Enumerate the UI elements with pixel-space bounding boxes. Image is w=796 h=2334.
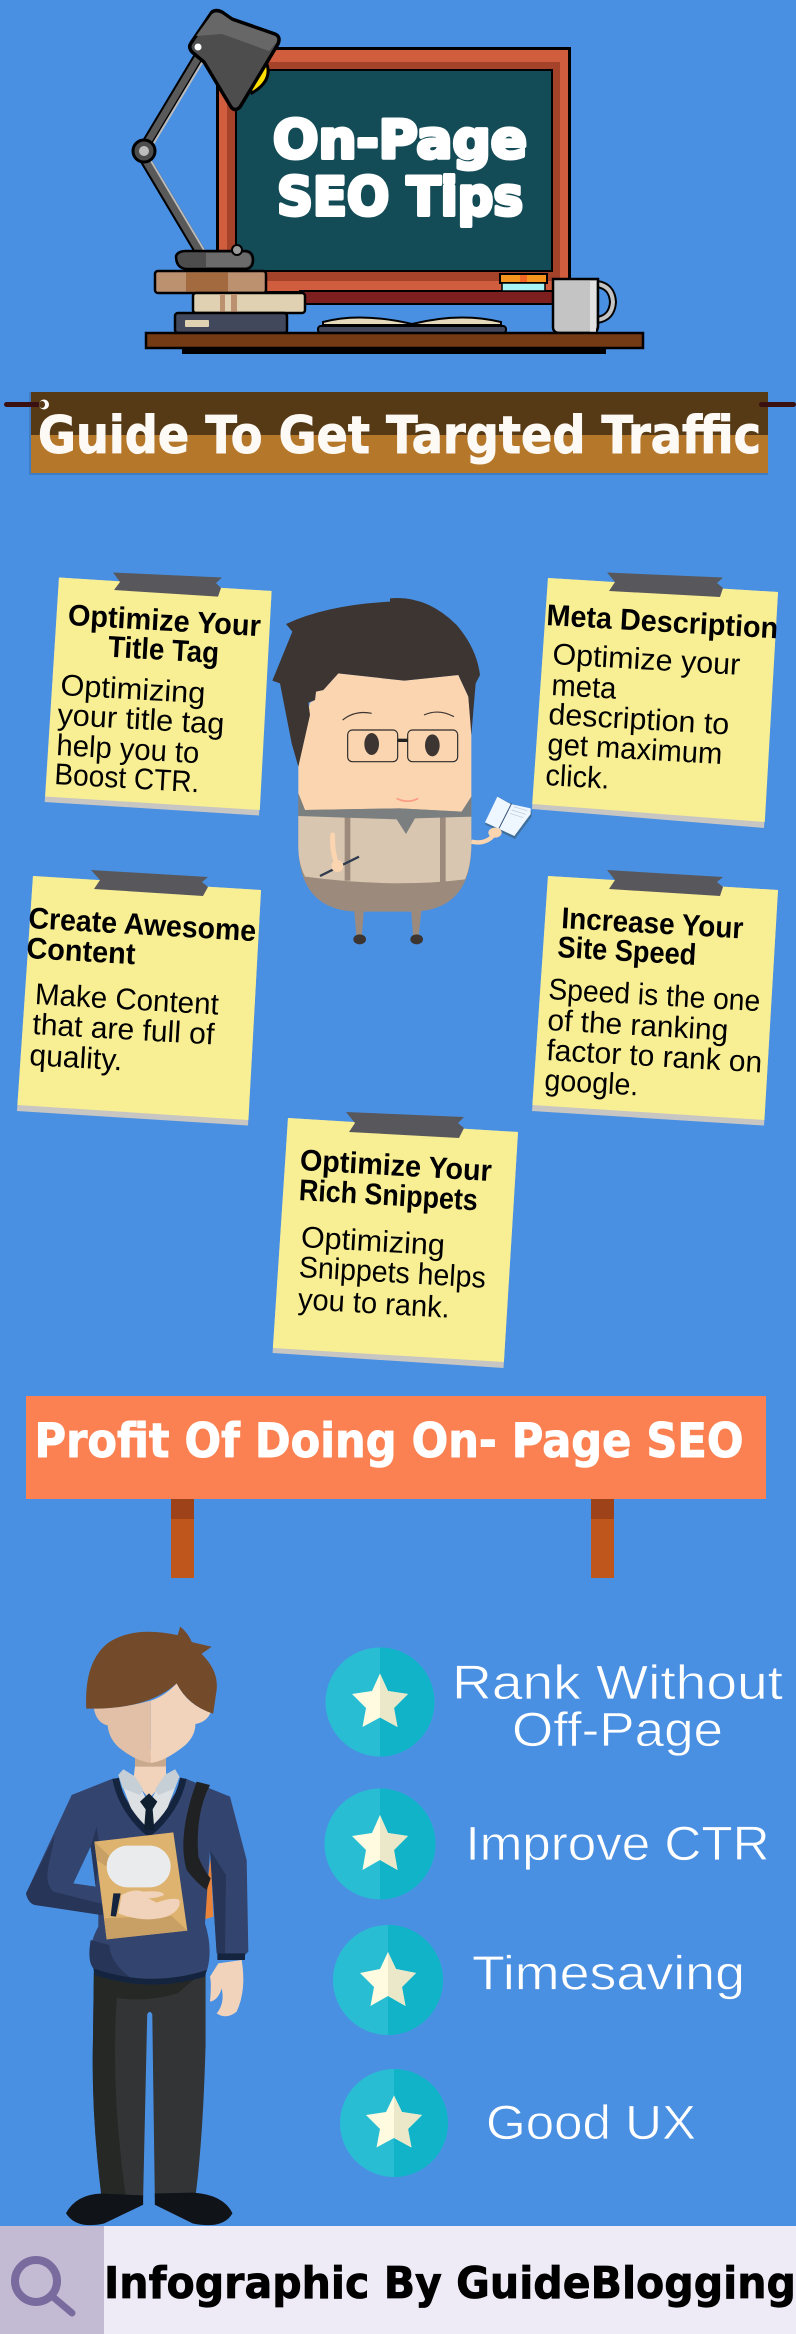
note body: Speed is the one bbox=[548, 973, 761, 1018]
benefit: rank without off-page bbox=[326, 1648, 783, 1757]
note body bbox=[54, 669, 225, 799]
icon: star badge bbox=[333, 1925, 443, 2035]
note heading: Optimize Your bbox=[299, 1144, 493, 1188]
note heading: Create Awesome bbox=[28, 902, 257, 948]
note body: quality. bbox=[29, 1039, 123, 1077]
note body: Make Content bbox=[34, 978, 220, 1022]
label bbox=[452, 1657, 783, 1757]
title bbox=[273, 110, 527, 228]
note heading: Rich Snippets bbox=[298, 1174, 479, 1217]
icon: open book bbox=[318, 317, 506, 333]
note heading: Site Speed bbox=[557, 931, 697, 972]
note body bbox=[545, 638, 741, 796]
note body: your title tag bbox=[57, 699, 225, 741]
note heading: Title Tag bbox=[107, 631, 220, 670]
label: Timesaving bbox=[472, 1948, 745, 2000]
illustration: student holding a book bbox=[26, 1627, 248, 2225]
note body: meta bbox=[551, 669, 618, 706]
icon: star badge bbox=[326, 1648, 434, 1756]
shelf bbox=[146, 333, 643, 354]
icon: hand holding book bbox=[471, 797, 532, 842]
legs and feet bbox=[353, 908, 423, 944]
benefit: good ux bbox=[340, 2069, 696, 2177]
arm with pen bbox=[320, 835, 359, 876]
note body bbox=[297, 1221, 487, 1325]
sweater, book and arms bbox=[26, 1767, 248, 2016]
label: Off-Page bbox=[512, 1704, 723, 1757]
head, hair and legs bbox=[66, 1627, 232, 2225]
icon: star badge bbox=[324, 1788, 436, 1900]
note body: click. bbox=[545, 759, 610, 796]
head and hair bbox=[272, 598, 480, 834]
note heading bbox=[67, 599, 262, 670]
banner: guide to get targeted traffic bbox=[4, 392, 796, 475]
note body: Boost CTR. bbox=[54, 758, 200, 799]
panel: optimize your rich snippets bbox=[273, 1112, 518, 1368]
footer bar bbox=[0, 2226, 796, 2334]
panel: optimize your title tag bbox=[45, 572, 272, 816]
benefit: improve ctr bbox=[324, 1788, 770, 1900]
blackboard bbox=[216, 47, 571, 304]
body bbox=[298, 793, 471, 912]
note heading bbox=[26, 902, 257, 971]
note body: you to rank. bbox=[297, 1283, 451, 1325]
note body bbox=[29, 978, 220, 1077]
note body: of the ranking bbox=[547, 1004, 729, 1047]
note heading: Content bbox=[26, 932, 136, 971]
note heading: Meta Description bbox=[546, 599, 779, 645]
icon: lamp bbox=[133, 10, 279, 269]
illustration: desk with blackboard, lamp, books and mug bbox=[133, 10, 643, 354]
icon: star badge bbox=[340, 2069, 448, 2177]
note body: Snippets helps bbox=[298, 1251, 487, 1295]
label: Improve CTR bbox=[466, 1818, 770, 1871]
panel: increase your site speed bbox=[532, 870, 778, 1126]
label: Rank Without bbox=[452, 1657, 783, 1710]
icon: magnifying glass bbox=[15, 2260, 72, 2313]
icon: chalk eraser bbox=[500, 274, 547, 291]
illustration: cartoon man with glasses bbox=[272, 598, 532, 944]
benefit: timesaving bbox=[333, 1925, 745, 2035]
icon: stack of books bbox=[155, 271, 305, 333]
signboard: profit of doing on-page seo bbox=[26, 1396, 766, 1578]
note body: Optimizing bbox=[300, 1221, 446, 1262]
label: Good UX bbox=[486, 2097, 696, 2150]
note heading bbox=[298, 1144, 493, 1217]
note body: description to bbox=[548, 698, 730, 741]
note body: Optimize your bbox=[552, 638, 741, 682]
note body: google. bbox=[544, 1064, 639, 1102]
note body: Optimizing bbox=[60, 669, 206, 710]
panel: create awesome content bbox=[17, 870, 261, 1126]
panel: meta description bbox=[532, 572, 779, 828]
note heading: Increase Your bbox=[561, 902, 744, 945]
note heading bbox=[557, 902, 744, 972]
signboard heading: Profit Of Doing On- Page SEO bbox=[34, 1414, 744, 1469]
title: SEO Tips bbox=[277, 167, 523, 228]
note body: get maximum bbox=[547, 728, 723, 771]
icon: mug bbox=[553, 279, 613, 333]
title: On-Page bbox=[273, 110, 527, 171]
note body: help you to bbox=[56, 729, 200, 770]
note body: that are full of bbox=[32, 1008, 216, 1052]
note body bbox=[544, 973, 763, 1102]
note heading: Optimize Your bbox=[67, 599, 262, 643]
note body: factor to rank on bbox=[546, 1034, 763, 1079]
